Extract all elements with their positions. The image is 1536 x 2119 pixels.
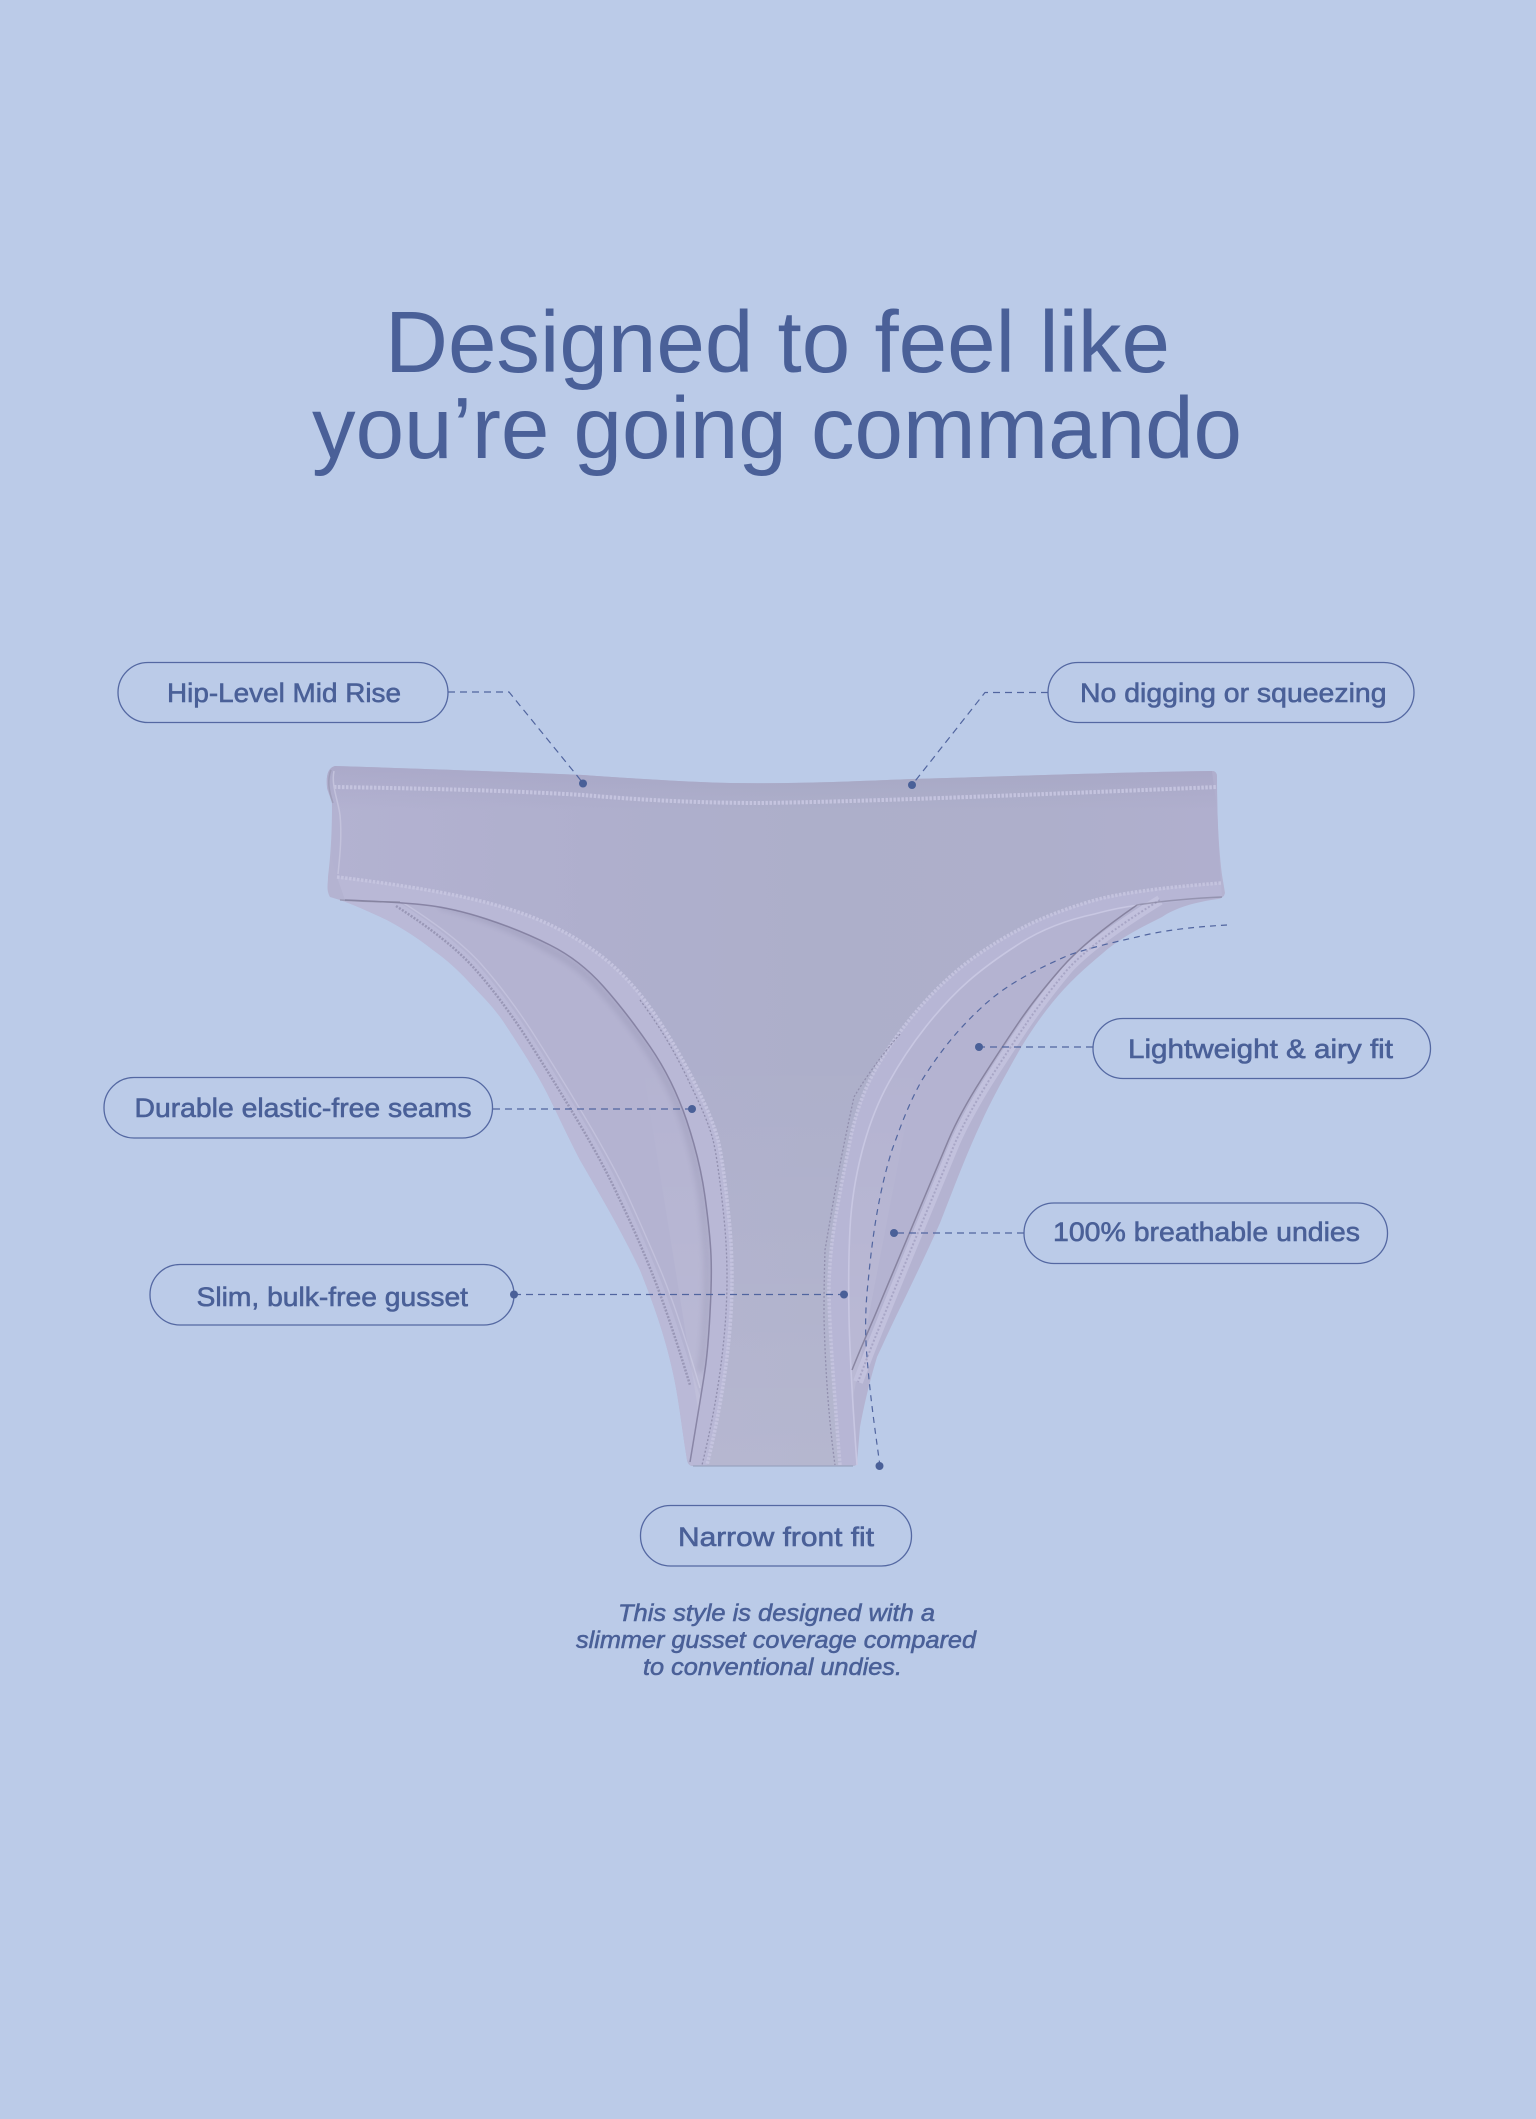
title: Designed to feel like [385,294,1170,391]
pill [1048,662,1414,722]
curved leader line [866,925,1227,1466]
right front stitching [829,883,1221,1465]
right front seam strip [829,883,1222,1465]
right back seam band [858,900,1160,1382]
label: Narrow front fit [678,1522,875,1552]
waistband top stitching [334,787,1217,803]
dot [908,781,916,789]
right dot [840,1290,848,1298]
left front dark edge [345,900,711,1462]
title: you’re going commando [312,380,1242,477]
bottom edge [693,1465,853,1467]
garment: undies illustration [327,766,1225,1466]
pill [1024,1203,1388,1264]
waistband lower right edge [1137,897,1222,905]
label: Lightweight & airy fit [1128,1034,1394,1064]
dot [688,1105,696,1113]
right back seam stitching [858,900,1160,1382]
leader line [448,692,583,783]
label: No digging or squeezing [1080,678,1386,708]
dot [579,780,587,788]
waistband lower left edge [340,900,400,902]
note text: to conventional undies. [643,1654,902,1681]
left band side fold [329,770,333,803]
callout: 100% breathable undies [890,1203,1388,1264]
leader line [979,1046,1093,1048]
label: Hip-Level Mid Rise [167,678,401,708]
callout: lightweight and airy fit [975,1018,1430,1078]
callout: narrow front fit [640,925,1227,1566]
title [312,294,1242,477]
left band side seam [333,771,341,874]
left back shadow near seam [440,905,707,1372]
dot [876,1462,884,1470]
leader line [514,1294,844,1296]
leader line [912,692,1048,785]
pill [104,1078,492,1138]
leader line [493,1108,692,1110]
note text: This style is designed with a [618,1600,935,1627]
callout: no digging or squeezing [908,662,1414,789]
pill [1093,1018,1430,1078]
left front seam strip [337,877,732,1465]
front panel lower highlight [640,1050,920,1465]
pill [118,662,448,722]
waistband top shading [327,766,1217,810]
label: Slim, bulk-free gusset [196,1282,469,1312]
callout: slim bulk-free gusset [150,1264,848,1325]
pill [640,1506,912,1566]
leader line [894,1232,1024,1234]
left dot [510,1290,518,1298]
note text [576,1600,977,1681]
left front stitching [337,877,732,1465]
callout: durable elastic-free seams [104,1078,696,1138]
right back dark edge [852,905,1137,1370]
pill [150,1264,514,1325]
left back seam strip [340,900,702,1462]
garment outline [327,766,1225,1466]
right front ridge [849,905,1140,1465]
note text: slimmer gusset coverage compared [576,1627,977,1654]
label: Durable elastic-free seams [134,1093,472,1123]
callout: hip-level mid rise [118,662,587,788]
label: 100% breathable undies [1053,1217,1360,1247]
dot [975,1043,983,1051]
front and waistband panel [327,766,1221,1465]
dot [890,1229,898,1237]
left back seam stitching [396,906,690,1385]
